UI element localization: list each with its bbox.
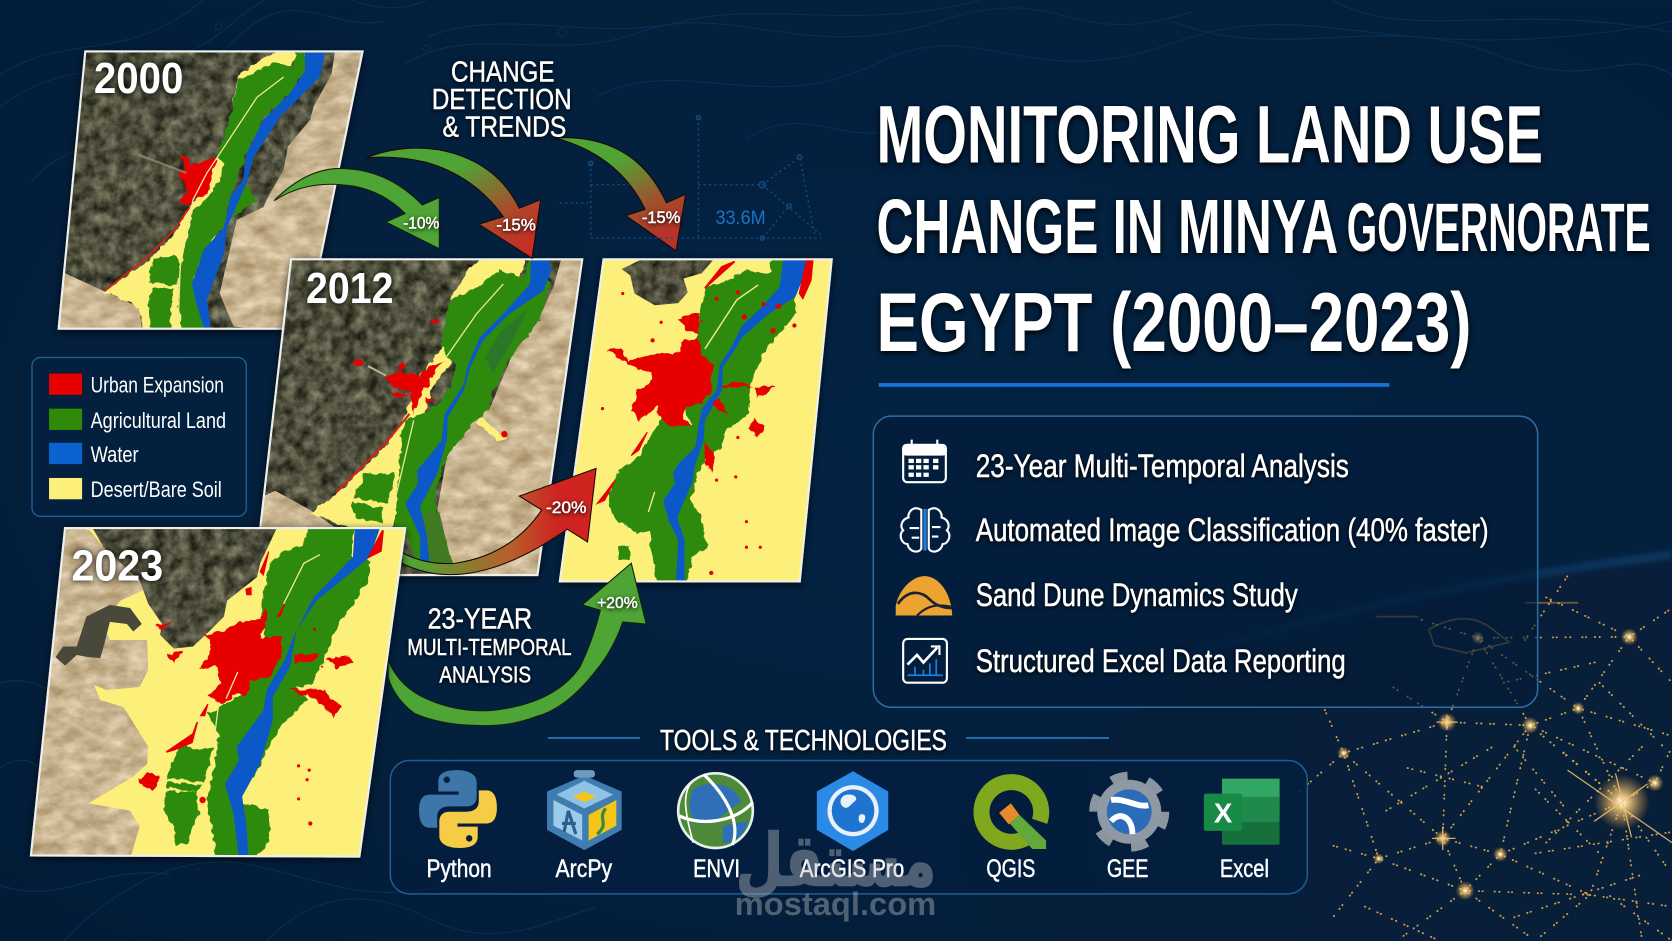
arrow: -15% change to 2012: -15% bbox=[496, 216, 536, 235]
heading: change detection and trends: & TRENDS bbox=[443, 112, 566, 144]
tool: gee bbox=[1095, 778, 1163, 883]
legend: agricultural land bbox=[49, 408, 226, 433]
heading: change detection and trends: DETECTION bbox=[432, 84, 572, 116]
arrow: -15% change to 2012 bbox=[366, 148, 541, 258]
legend: desert and bare soil: Desert/Bare Soil bbox=[91, 477, 222, 502]
map: classified result bbox=[554, 256, 837, 587]
legend: water bbox=[49, 442, 139, 467]
arrow: -15% change to result: -15% bbox=[642, 208, 680, 227]
blueprint diagram with value: 33.6M bbox=[716, 208, 766, 229]
text: sand dune study: Sand Dune Dynamics Study bbox=[976, 577, 1298, 613]
tool: excel: X bbox=[1214, 797, 1233, 828]
title bbox=[877, 89, 1651, 369]
map: 2012 bbox=[251, 256, 586, 581]
label: 23-year multi-temporal analysis bbox=[407, 603, 572, 688]
label: 23-year multi-temporal analysis: ANALYSIS bbox=[439, 662, 531, 688]
icon: sand dune bbox=[896, 576, 952, 616]
legend: water: Water bbox=[91, 442, 139, 467]
panel: key features bbox=[873, 416, 1538, 707]
tool: qgis bbox=[981, 782, 1046, 883]
arrow: -10% change: -10% bbox=[403, 213, 439, 232]
title: CHANGE IN MINYA bbox=[877, 185, 1338, 270]
heading: tools and technologies: TOOLS & TECHNOLOGIES bbox=[660, 725, 947, 757]
tool: envi bbox=[678, 773, 753, 883]
legend: urban expansion: Urban Expansion bbox=[91, 373, 224, 398]
year label: 2012: 2012 bbox=[306, 264, 393, 313]
tool: python: Python bbox=[427, 856, 492, 883]
text: excel reporting: Structured Excel Data Reporting bbox=[976, 643, 1346, 679]
legend panel bbox=[32, 357, 246, 516]
watermark bbox=[735, 819, 936, 922]
icon: calendar bbox=[903, 440, 946, 482]
tool: python bbox=[419, 770, 497, 883]
label: 23-year multi-temporal analysis: 23-YEAR bbox=[428, 603, 532, 635]
title underline bbox=[879, 383, 1389, 387]
year label: 2000: 2000 bbox=[94, 54, 183, 103]
year label: 2023: 2023 bbox=[71, 541, 163, 590]
tool: arcgis pro bbox=[800, 771, 904, 883]
arrow: +20% change: +20% bbox=[597, 595, 638, 612]
heading: change detection and trends bbox=[432, 56, 572, 144]
label: 23-year multi-temporal analysis: MULTI-TEMPORAL bbox=[407, 634, 572, 660]
tool: arcgis pro: ArcGIS Pro bbox=[800, 856, 904, 883]
text: 23-year analysis: 23-Year Multi-Temporal Analysis bbox=[976, 448, 1349, 484]
text: automated classification: Automated Image Classification (40% faster) bbox=[976, 512, 1489, 548]
arrow: -20% change: -20% bbox=[546, 498, 586, 517]
watermark: مستقل bbox=[736, 819, 936, 903]
map: 2023 bbox=[21, 523, 411, 859]
map: 2000 bbox=[53, 43, 368, 331]
tool: gee: GEE bbox=[1107, 856, 1148, 883]
heading: change detection and trends: CHANGE bbox=[451, 56, 554, 88]
tool: envi: ENVI bbox=[693, 856, 740, 883]
arrow: +20% change bbox=[388, 563, 646, 726]
icon: chart bbox=[903, 639, 947, 683]
legend: desert and bare soil bbox=[49, 477, 222, 502]
panel: tools bbox=[390, 761, 1307, 894]
blueprint diagram with value bbox=[560, 115, 821, 240]
legend: agricultural land: Agricultural Land bbox=[91, 408, 226, 433]
legend: urban expansion bbox=[49, 373, 224, 398]
tool: arcpy: ArcPy bbox=[556, 856, 613, 883]
title: EGYPT (2000–2023) bbox=[877, 276, 1472, 369]
arrow: -15% change to result bbox=[554, 138, 686, 251]
tool: excel: Excel bbox=[1220, 856, 1269, 883]
arrow: -10% change bbox=[274, 168, 439, 249]
tool: excel bbox=[1204, 779, 1280, 883]
tool: qgis: QGIS bbox=[986, 856, 1035, 883]
arrow: -20% change bbox=[402, 468, 596, 575]
watermark: mostaql.com bbox=[735, 886, 936, 922]
tool: arcpy bbox=[547, 770, 622, 883]
icon: brain bbox=[901, 508, 949, 552]
